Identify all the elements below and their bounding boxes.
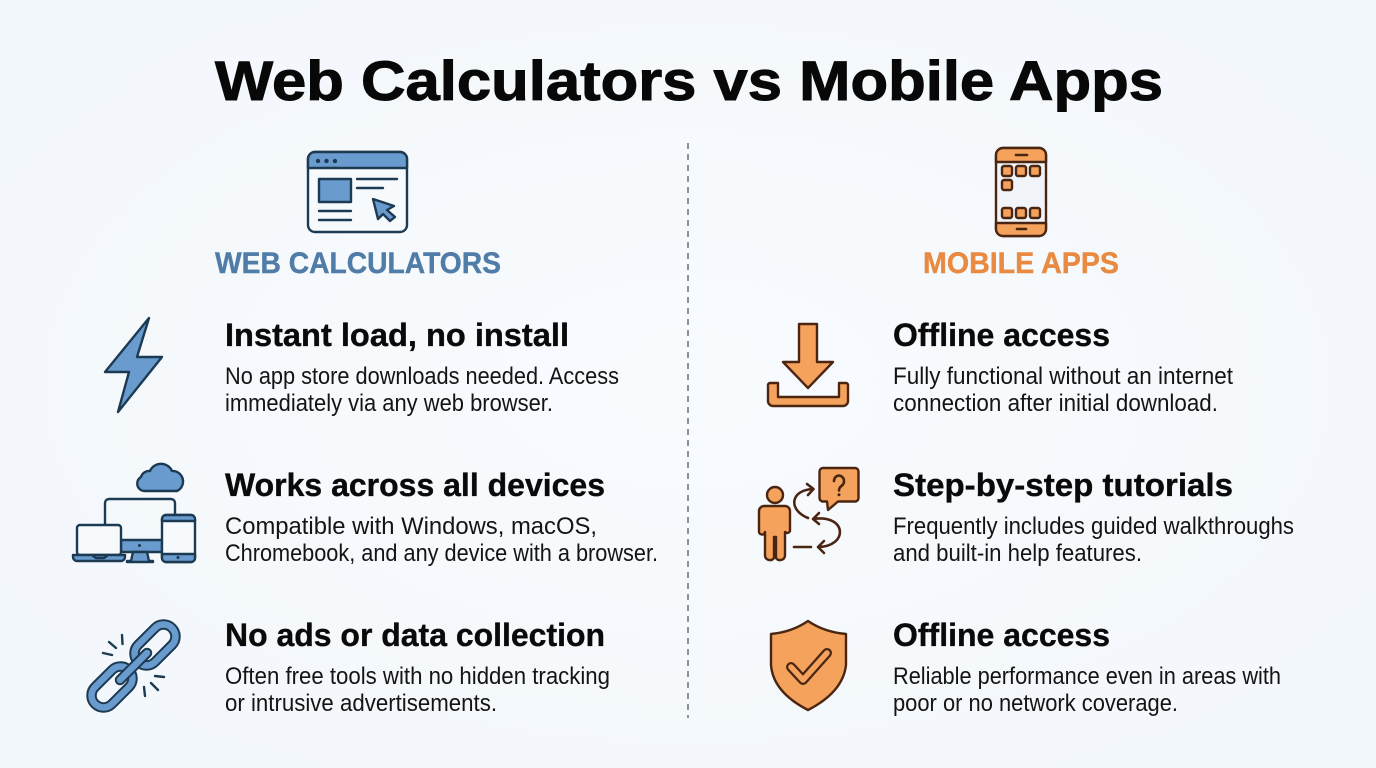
item: works across devices <box>73 464 658 567</box>
heading: instant load: Instant load, no install <box>225 317 569 353</box>
text: offline description <box>893 363 1233 417</box>
heading: works across devices: Works across all devices <box>225 467 605 503</box>
title: Web Calculators vs Mobile Apps <box>215 49 1163 112</box>
text: devices description <box>225 513 658 567</box>
text: instant load description: No app store downloads needed. Access <box>225 363 619 390</box>
text: reliable description: Reliable performance even in areas with <box>893 663 1281 690</box>
text: no ads description: or intrusive advertisements. <box>225 690 497 717</box>
text: reliable description <box>893 663 1281 717</box>
text: devices description: Chromebook, and any device with a browser. <box>225 540 658 567</box>
icon: lightning bolt <box>105 318 162 412</box>
item: offline access reliable <box>771 617 1281 717</box>
icon: chain link <box>87 620 180 712</box>
heading: offline access: Offline access <box>893 317 1110 353</box>
text: no ads description <box>225 663 610 717</box>
item: tutorials <box>759 467 1294 567</box>
icon: smartphone <box>996 148 1046 236</box>
icon: shield with check <box>771 621 846 710</box>
text: tutorials description <box>893 513 1294 567</box>
item: instant load <box>105 317 619 417</box>
panel: web calculators <box>73 152 658 717</box>
item: offline access <box>768 317 1233 417</box>
icon: devices and cloud <box>73 464 195 562</box>
icon: browser window <box>308 152 407 232</box>
text: offline description: Fully functional without an internet <box>893 363 1233 390</box>
item: no ads <box>87 617 610 717</box>
text: tutorials description: Frequently includes guided walkthroughs <box>893 513 1294 540</box>
text: instant load description <box>225 363 619 417</box>
text: instant load description: immediately via any web browser. <box>225 390 553 417</box>
text: devices description: Compatible with Windows, macOS, <box>225 513 597 540</box>
text: offline description: connection after initial download. <box>893 390 1218 417</box>
heading: no ads: No ads or data collection <box>225 617 605 653</box>
panel: mobile apps <box>759 148 1294 717</box>
icon: download arrow <box>768 324 848 406</box>
heading: mobile apps: MOBILE APPS <box>923 247 1119 280</box>
heading: tutorials: Step-by-step tutorials <box>893 467 1233 503</box>
text: tutorials description: and built-in help features. <box>893 540 1142 567</box>
text: no ads description: Often free tools with no hidden tracking <box>225 663 610 690</box>
heading: offline access second: Offline access <box>893 617 1110 653</box>
heading: web calculators: WEB CALCULATORS <box>215 247 501 280</box>
icon: person with question bubble <box>759 468 858 560</box>
text: reliable description: poor or no network coverage. <box>893 690 1178 717</box>
